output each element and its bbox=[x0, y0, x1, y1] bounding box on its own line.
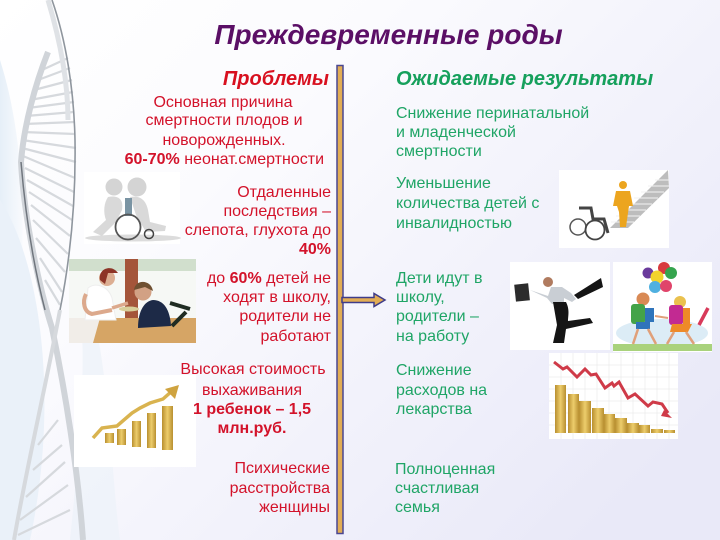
text: lower mortality: Снижение перинатальной bbox=[396, 105, 589, 122]
icon: rising coins chart bbox=[74, 375, 196, 467]
text: lower mortality: смертности bbox=[396, 143, 482, 160]
central divider with arrow bbox=[337, 66, 385, 534]
text: main cause: новорожденных. bbox=[162, 132, 286, 149]
text: fewer disabled children: количества детей с bbox=[396, 195, 539, 212]
text: happy family: Полноценная bbox=[395, 461, 495, 478]
text: lower drug costs: Снижение bbox=[396, 362, 472, 379]
text: fewer disabled children bbox=[396, 175, 539, 232]
text: children go to school: родители – bbox=[396, 308, 479, 325]
text: cost of nursing: 1 ребенок – 1,5 bbox=[193, 401, 311, 418]
text: main cause: Основная причина bbox=[153, 94, 293, 111]
text: happy family: семья bbox=[395, 499, 440, 516]
text: lower mortality: и младенческой bbox=[396, 124, 516, 141]
text: long-term consequences: слепота, глухота до bbox=[185, 222, 331, 239]
text: main cause bbox=[125, 94, 324, 168]
text: cost of nursing bbox=[180, 361, 326, 437]
icon: figures with wheelchair bbox=[84, 172, 181, 244]
icon: running businessman bbox=[510, 262, 610, 350]
text: children go to school: школу, bbox=[396, 289, 445, 306]
heading: expected results: Ожидаемые результаты bbox=[396, 68, 653, 90]
text: lower drug costs: лекарства bbox=[396, 401, 472, 418]
text: main cause: смертности плодов и bbox=[145, 112, 303, 129]
text: happy family bbox=[395, 461, 495, 516]
text: fewer disabled children: инвалидностью bbox=[396, 215, 512, 232]
photo: woman feeding boy bbox=[69, 259, 196, 343]
text: cost of nursing: млн.руб. bbox=[218, 420, 286, 437]
text: long-term consequences bbox=[185, 184, 331, 258]
text: fewer disabled children: Уменьшение bbox=[396, 175, 491, 192]
icon: children with balloons bbox=[613, 262, 712, 352]
text: school and work: работают bbox=[260, 328, 332, 345]
text: school and work bbox=[207, 270, 332, 345]
text: main cause: 60-70% неонат.смертности bbox=[125, 151, 324, 168]
text: school and work: родители не bbox=[239, 308, 331, 325]
icon: falling coins chart bbox=[549, 353, 678, 439]
text: lower drug costs bbox=[396, 362, 487, 418]
text: cost of nursing: Высокая стоимость bbox=[180, 361, 326, 378]
text: happy family: счастливая bbox=[395, 480, 479, 497]
decorative helix bbox=[0, 0, 120, 540]
text: cost of nursing: выхаживания bbox=[202, 382, 302, 399]
text: school and work: до 60% детей не bbox=[207, 270, 331, 287]
text: lower drug costs: расходов на bbox=[396, 382, 487, 399]
text: mental disorders bbox=[230, 460, 330, 516]
text: long-term consequences: 40% bbox=[299, 241, 331, 258]
text: children go to school: на работу bbox=[396, 328, 469, 345]
title: Преждевременные роды bbox=[214, 19, 563, 50]
text: lower mortality bbox=[396, 105, 589, 160]
icon: wheelchair and stairs bbox=[559, 170, 669, 248]
text: mental disorders: расстройства bbox=[230, 480, 330, 497]
text: mental disorders: женщины bbox=[259, 499, 330, 516]
text: long-term consequences: последствия – bbox=[223, 203, 331, 220]
text: school and work: ходят в школу, bbox=[223, 289, 331, 306]
text: mental disorders: Психические bbox=[235, 460, 330, 477]
text: children go to school: Дети идут в bbox=[396, 270, 482, 287]
heading: problems: Проблемы bbox=[223, 68, 329, 90]
text: long-term consequences: Отдаленные bbox=[237, 184, 331, 201]
text: children go to school bbox=[396, 270, 482, 345]
